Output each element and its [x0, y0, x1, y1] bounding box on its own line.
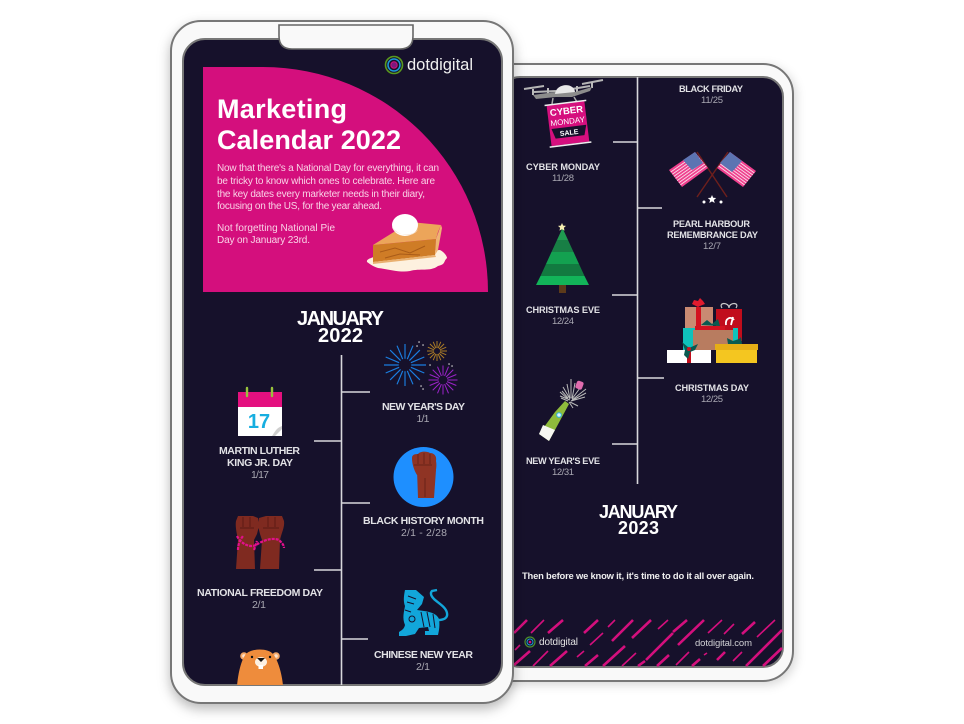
icon: calendar 17 [238, 388, 282, 436]
timeline: start of year [314, 355, 370, 685]
heading: January 2023: JANUARY [599, 502, 678, 522]
label: Martin Luther King Jr. Day: 1/17 [251, 469, 269, 481]
footer url: dotdigital.com [695, 638, 752, 649]
label: Christmas Eve [526, 306, 600, 324]
label: New Year's Eve: NEW YEAR'S EVE [526, 456, 600, 466]
intro text [217, 163, 439, 246]
label: Christmas Eve: 12/24 [552, 316, 574, 327]
label: Chinese New Year [374, 651, 473, 670]
footer stripes [514, 620, 782, 666]
label: Black History Month: 2/1 - 2/28 [401, 527, 447, 539]
heading: January 2022: 2022 [318, 325, 363, 347]
label: Christmas Eve: CHRISTMAS EVE [526, 305, 600, 315]
label: Pearl Harbour Remembrance Day: PEARL HARBOUR [673, 219, 750, 229]
intro text: be tricky to know which ones to celebrate. Here are [217, 176, 435, 187]
icon: champagne bottle [539, 379, 586, 441]
label: Cyber Monday [526, 164, 600, 181]
icon: blue tiger [399, 590, 447, 636]
label: Black History Month: BLACK HISTORY MONTH [363, 515, 484, 527]
intro text: Day on January 23rd. [217, 235, 310, 246]
heading: January 2023: 2023 [618, 518, 659, 538]
label: Black Friday: BLACK FRIDAY [679, 84, 743, 94]
label: Martin Luther King Jr. Day: KING JR. DAY [227, 457, 293, 469]
notch [279, 25, 413, 49]
heading: January 2023 [599, 505, 678, 534]
icon: Christmas tree [536, 223, 589, 293]
label: Black Friday: 11/25 [701, 95, 723, 106]
label: Christmas Day: 12/25 [701, 394, 723, 405]
label: Chinese New Year: CHINESE NEW YEAR [374, 649, 473, 661]
label: New Year's Day [382, 403, 465, 422]
icon: fireworks [384, 341, 458, 394]
logo: dotdigital: dotdigital [407, 56, 473, 74]
icon: crossed American flags [669, 152, 756, 204]
label: New Year's Eve [526, 458, 600, 475]
label: National Freedom Day: NATIONAL FREEDOM DAY [197, 587, 323, 599]
icon: drone with Cyber Monday banner: SALE [559, 129, 579, 138]
intro text: Now that there's a National Day for everything, it can [217, 163, 439, 174]
label: Black Friday [680, 86, 743, 103]
label: Cyber Monday: CYBER MONDAY [526, 162, 600, 172]
intro text: the key dates every marketer needs in their diary, [217, 189, 425, 200]
label: Pearl Harbour Remembrance Day [668, 220, 758, 249]
title [218, 98, 400, 150]
icon: calendar 17: 17 [248, 411, 270, 433]
icon: raised fist in blue circle [394, 447, 454, 507]
label: New Year's Day: NEW YEAR'S DAY [382, 401, 465, 413]
icon: drone with Cyber Monday banner: MONDAY [550, 115, 586, 128]
label: National Freedom Day: 2/1 [252, 599, 266, 611]
label: Chinese New Year: 2/1 [416, 661, 430, 673]
icon: slice of pie [367, 214, 447, 272]
icon: fists with broken chains [236, 516, 284, 569]
phone: back screen, end of year [480, 64, 793, 681]
label: New Year's Day: 1/1 [416, 413, 430, 425]
intro text: Not forgetting National Pie [217, 223, 335, 234]
label: Black History Month [364, 517, 484, 536]
label: Pearl Harbour Remembrance Day: 12/7 [703, 241, 721, 252]
closing text: Then before we know it, it's time to do it all over again. [522, 570, 754, 581]
title: Calendar 2022 [217, 125, 401, 155]
label: Christmas Day: CHRISTMAS DAY [675, 383, 749, 393]
logo: dotdigital footer: dotdigital [539, 637, 578, 648]
heading: January 2022 [297, 311, 384, 342]
label: National Freedom Day [198, 589, 323, 608]
label: Cyber Monday: 11/28 [552, 173, 574, 184]
label: Christmas Day [675, 384, 749, 402]
phone: front screen, start of year [171, 21, 513, 703]
icon: drone with Cyber Monday banner [524, 80, 603, 148]
title: Marketing [217, 94, 347, 124]
label: Martin Luther King Jr. Day: MARTIN LUTHER [219, 445, 300, 457]
icon: drone with Cyber Monday banner: CYBER [549, 104, 584, 119]
icon: groundhog [237, 650, 283, 686]
label: Martin Luther King Jr. Day [220, 447, 300, 478]
icon: pile of gifts [667, 298, 758, 363]
label: New Year's Eve: 12/31 [552, 467, 574, 478]
timeline: end of year [612, 77, 664, 484]
intro text: focusing on the US, for the year ahead. [217, 201, 382, 212]
label: Pearl Harbour Remembrance Day: REMEMBRANCE DAY [667, 230, 758, 240]
panel: pink hero quarter circle [203, 67, 488, 292]
heading: January 2022: JANUARY [297, 308, 385, 330]
